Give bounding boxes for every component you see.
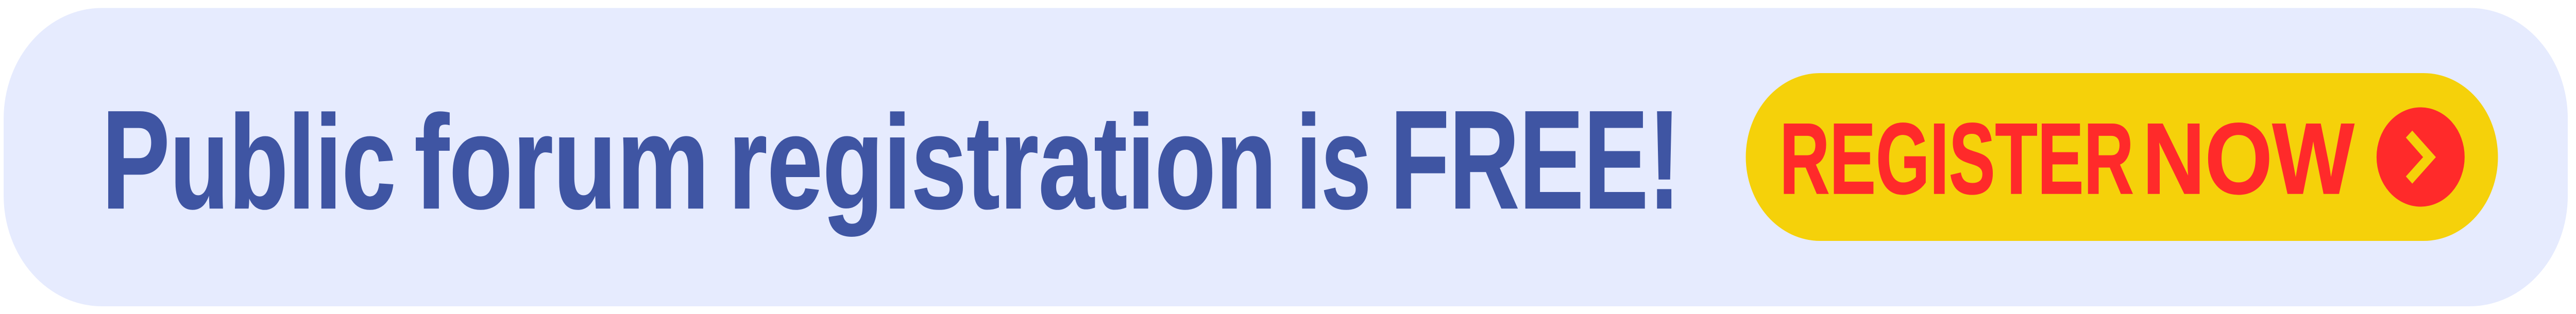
icon: red circle with chevron arrow bbox=[2377, 107, 2465, 207]
heading word: forum: forum bbox=[414, 88, 709, 236]
button label: REGISTER: REGISTER bbox=[1780, 103, 2134, 215]
heading word: registration: registration bbox=[728, 88, 1277, 236]
heading word: is: is bbox=[1296, 88, 1371, 236]
button: register now bbox=[1746, 73, 2498, 241]
heading word: Public: Public bbox=[102, 82, 396, 238]
button label: NOW: NOW bbox=[2142, 103, 2354, 215]
button background pill bbox=[1746, 73, 2498, 241]
heading word: FREE!: FREE! bbox=[1390, 82, 1681, 238]
heading: Public forum registration is FREE! bbox=[102, 82, 1681, 238]
